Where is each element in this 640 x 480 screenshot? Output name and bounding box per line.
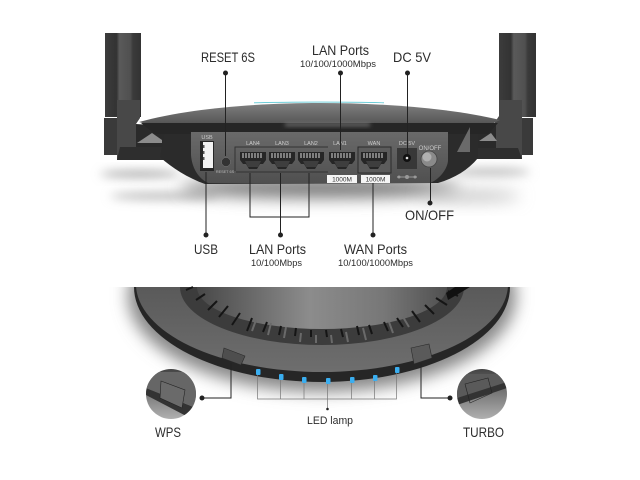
WPS zoom circle [146,369,196,419]
label: LAN speed top: 10/100/1000Mbps [300,59,377,69]
TURBO leader [421,363,450,398]
LED bracket [258,373,396,409]
1000M badges: 1000M [332,176,352,184]
usb port: USB [201,135,213,141]
port labels: LAN1 [333,141,347,147]
floor shadow under router [100,168,530,201]
close-up shadow [117,287,527,404]
WAN port [361,152,387,169]
reset button [216,158,235,174]
label: LAN Ports bottom: LAN Ports [249,241,306,257]
label: WAN Ports: WAN Ports [344,241,407,257]
infographic canvas [100,33,536,437]
label: WAN speed: 10/100/1000Mbps [338,258,414,268]
1000M badges: 1000M [366,176,385,184]
LED lamps [256,367,400,384]
label: WPS: WPS [155,424,181,440]
rear port panel [191,127,470,184]
left antennas [104,33,168,160]
label: TURBO: TURBO [463,424,504,440]
label: RESET 6S: RESET 6S [201,49,255,65]
1000M badges [327,175,390,184]
callout leaders for rear view [206,73,430,235]
TURBO dot [448,396,452,400]
vent slots [186,287,458,337]
label: USB: USB [194,241,218,257]
label: LAN Ports top: LAN Ports [312,42,369,58]
WPS leader [202,363,231,398]
DC jack [397,148,417,179]
port labels: ON/OFF [419,146,442,152]
LED dot [326,408,329,410]
TURBO zoom circle [457,369,507,419]
port labels: DC 5V [399,141,415,147]
teal LED glow on dome [254,101,384,104]
callout dots [204,70,432,238]
reset button: RESET 6S [216,170,235,174]
label: LED lamp: LED lamp [307,415,353,427]
WPS dot [200,396,204,400]
port labels: LAN4 [246,141,260,147]
port labels: LAN3 [275,141,289,147]
WPS button outline [222,348,245,365]
label: ON/OFF: ON/OFF [405,207,454,223]
close-up body [134,287,510,382]
LAN ports [240,152,355,169]
label: DC 5V: DC 5V [393,49,432,65]
dark vent at upper right [446,287,470,300]
TURBO button outline [411,344,432,364]
router body [139,102,500,184]
port labels: WAN [368,141,380,147]
usb port [200,135,214,171]
port labels [246,141,442,152]
LAN and WAN port frame [235,147,391,173]
on/off button [421,151,437,167]
lower panel: router top close-up [117,286,527,404]
port labels: LAN2 [304,141,318,147]
label: LAN speed bottom: 10/100Mbps [251,258,303,268]
light slats between vents [252,317,409,343]
right antennas [470,33,536,159]
